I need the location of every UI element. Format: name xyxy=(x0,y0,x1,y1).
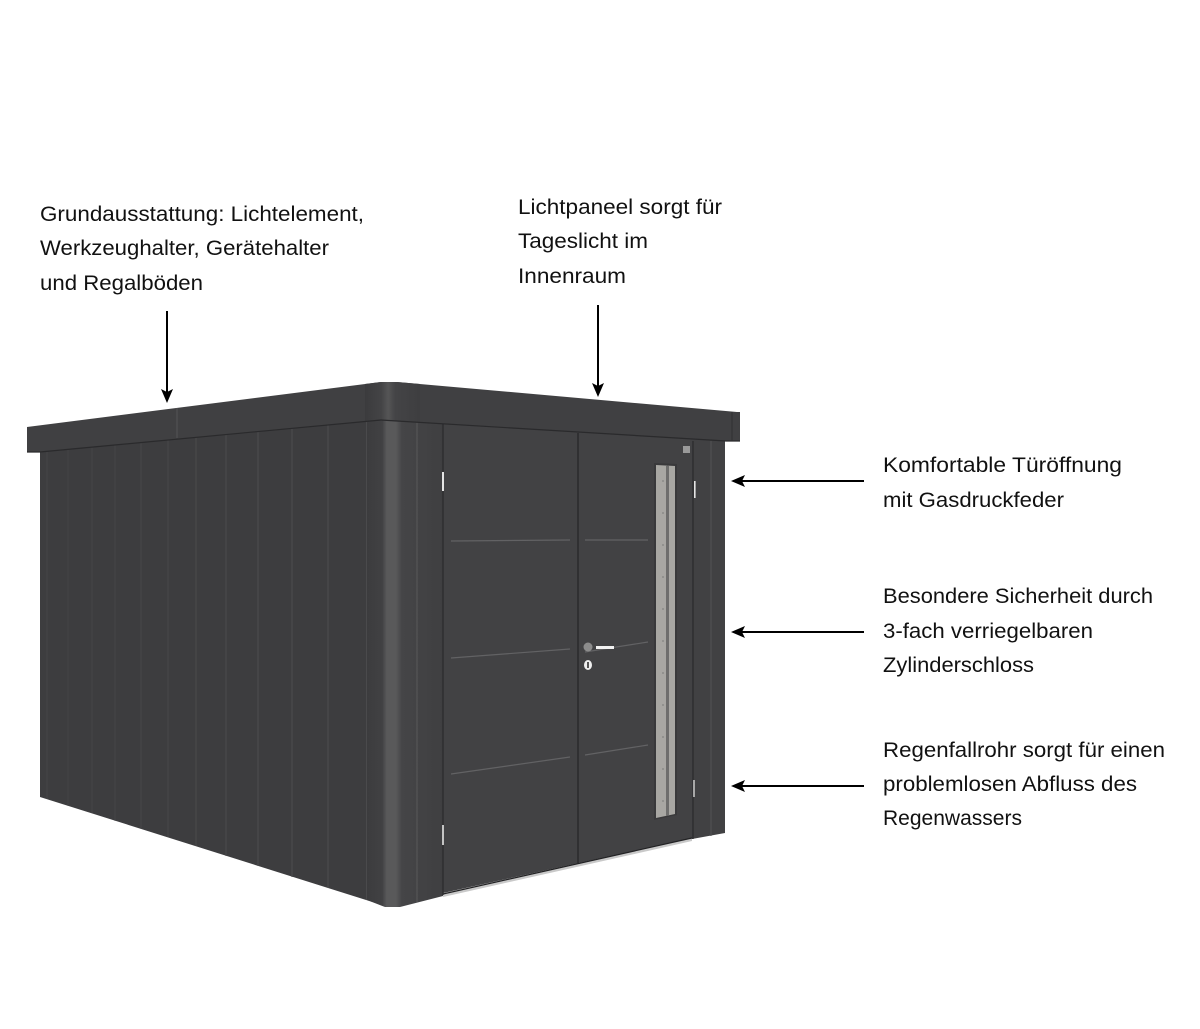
text: Türöffnung: Komfortable Türöffnung xyxy=(883,453,1122,477)
text: Lichtpaneel: Tageslicht im xyxy=(518,229,648,253)
text: Sicherheit: 3-fach verriegelbaren xyxy=(883,619,1093,643)
small square sensor xyxy=(683,446,690,453)
threshold xyxy=(443,838,692,897)
arrow: to roof right xyxy=(592,305,604,397)
arrow: downpipe xyxy=(731,780,864,792)
text: Lichtpaneel: Innenraum xyxy=(518,264,626,288)
panel: front wall right strip xyxy=(692,436,725,839)
text: Lichtpaneel: Lichtpaneel sorgt für xyxy=(518,195,722,219)
text: Grundausstattung: und Regalböden xyxy=(40,271,203,295)
door grooves xyxy=(451,540,648,774)
text: Türöffnung: mit Gasdruckfeder xyxy=(883,488,1064,512)
panel: roof fascia xyxy=(27,382,740,452)
panel: double door xyxy=(442,418,696,895)
arrow: lock xyxy=(731,626,864,638)
text: Grundausstattung: Werkzeughalter, Gerätehalter xyxy=(40,236,329,260)
text: Sicherheit: Besondere Sicherheit durch xyxy=(883,584,1153,608)
text: Türöffnung xyxy=(883,453,1122,512)
text: Sicherheit xyxy=(883,584,1153,677)
cylinder lock xyxy=(584,660,592,670)
hinges xyxy=(442,472,696,845)
text: Grundausstattung xyxy=(40,202,364,295)
text: Sicherheit: Zylinderschloss xyxy=(883,653,1034,677)
panel: left side wall xyxy=(40,420,385,906)
text: Lichtpaneel xyxy=(518,195,722,288)
panel: rounded corner post xyxy=(367,420,443,907)
text: Grundausstattung: Grundausstattung: Lichtelement, xyxy=(40,202,364,226)
arrow: door opening xyxy=(731,475,864,487)
line: corner post seam xyxy=(416,422,418,902)
text: Regenfallrohr xyxy=(883,738,1165,830)
text: Regenfallrohr: Regenfallrohr sorgt für einen xyxy=(883,738,1165,762)
text: Regenfallrohr: Regenwassers xyxy=(883,806,1022,830)
shed xyxy=(27,382,740,907)
text: Regenfallrohr: problemlosen Abfluss des xyxy=(883,772,1137,796)
arrow: to roof left xyxy=(161,311,173,403)
door handle xyxy=(584,642,614,652)
light panel window xyxy=(654,463,677,820)
